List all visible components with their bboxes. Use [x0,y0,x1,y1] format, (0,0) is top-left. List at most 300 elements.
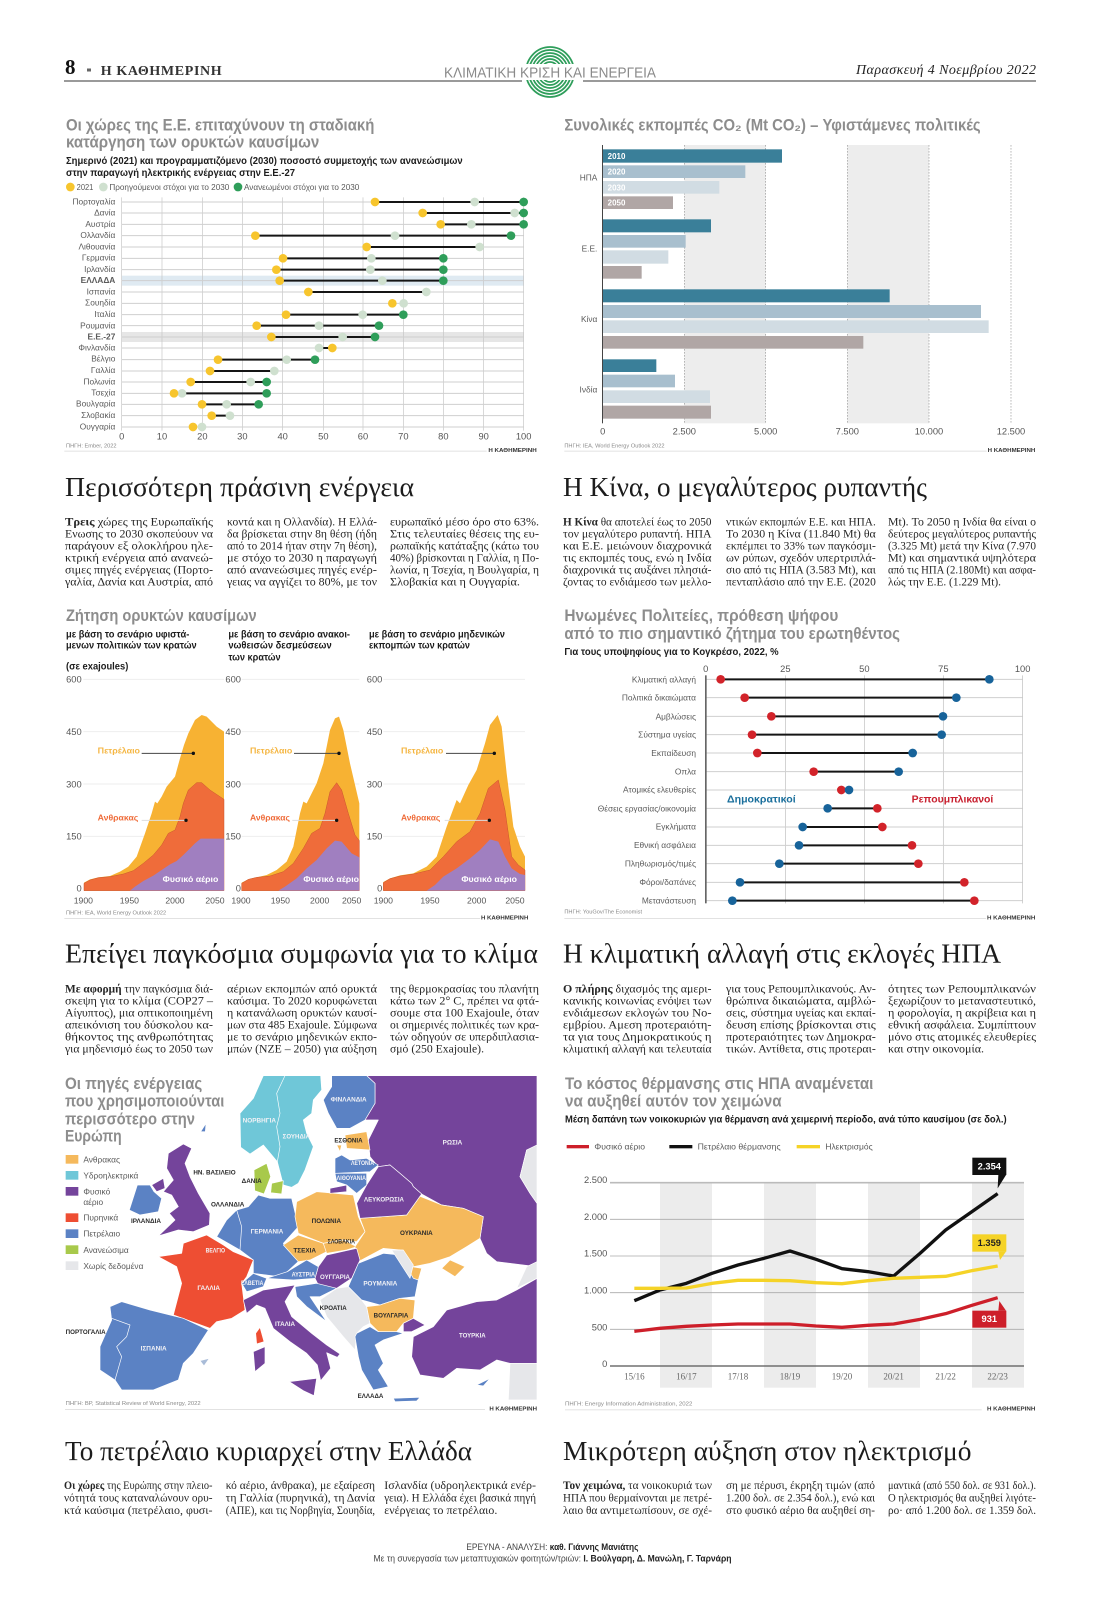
x axis labels: 21/22 [935,1372,956,1382]
Republican dots [716,675,979,905]
country labels: Αυστρία [85,219,116,229]
y axis labels: 150 [367,832,382,842]
text block: US elections: Ο πλήρης διχασμός της αμερι- [563,984,712,996]
text block: China: από τις ΗΠΑ (2.180Mt) και ασφα- [888,564,1036,576]
chart subtitle [66,156,463,179]
map legend: αέριο [83,1197,103,1207]
x axis labels: 7.500 [836,427,859,437]
date: Παρασκευή 4 Νοεμβρίου 2022 [855,63,1036,78]
y axis labels: 500 [592,1322,607,1332]
y axis labels: 300 [225,779,241,789]
map of Europe [100,1076,537,1402]
text block: green energy: κοντά και η Ολλανδία). Η Ελλά- [227,516,377,528]
map legend: Υδροηλεκτρικά [83,1170,139,1180]
x axis labels: 60 [358,432,368,442]
map labels: dark: ΗΝ. ΒΑΣΙΛΕΙΟ [193,1169,236,1176]
x axis labels: 2050 [205,895,225,905]
x axis labels: 2000 [467,895,486,905]
text block: green energy: κτρική ενέργεια από ανανεώ- [65,552,213,564]
page number: 8 [65,55,76,79]
x axis labels: 1950 [420,895,440,905]
heading: climate agreement: Επείγει παγκόσμια συμφωνία για το κλίμα [65,938,538,968]
issue labels: Εθνική ασφάλεια [634,840,696,850]
x axis labels: 0 [119,432,124,442]
y axis labels: 0 [602,1359,607,1369]
chart title [565,1075,873,1111]
text block: green energy: 40%) βρίσκονται η Γαλλία, η Πο- [390,552,539,564]
map title: Οι πηγές ενέργειας [65,1075,202,1093]
text block: green energy: από το 2014 ήταν στην 7η θέση), [227,540,377,552]
y axis labels: 150 [66,832,82,842]
x axis labels: 20/21 [883,1372,904,1382]
chart subtitle: στην παραγωγή ηλεκτρικής ενέργειας στην Ε.Ε.-27 [66,168,295,179]
map labels: light: ΓΕΡΜΑΝΙΑ [251,1228,284,1235]
text block: oil in Greece: Οι χώρες της Ευρώπης στην πλειο- [64,1479,213,1492]
text block: US elections: ξεχωρίζουν το μεταναστευτικό, [888,996,1036,1008]
area chart: stated policies: Ανθρακας [98,812,138,822]
text block: climate agreement: για μηδενισμό έως το 2050 των [64,1044,213,1056]
area chart: announced pledges: Πετρέλαιο [250,745,292,755]
text block: green energy: σιμες πηγές ενέργειας (Πορτο- [65,564,213,576]
x axis labels: 22/23 [987,1372,1008,1382]
text block: electricity: ση με πέρυσι, έκρηξη τιμών (από [726,1480,875,1492]
x axis labels [600,427,1025,437]
issue labels: Εγκλήματα [656,822,696,832]
icon: fingerprint logo [526,47,574,97]
issue labels: Σύστημα υγείας [638,730,696,740]
text block: climate agreement: κάτω των 2° C, πρέπει να φτά- [390,996,539,1008]
background bands [684,145,929,423]
y axis labels: 450 [367,727,382,737]
country labels: Πορτογαλία [72,196,116,206]
scenario subtitles: με βάση το σενάριο μηδενικών [369,629,505,640]
text block: oil in Greece: νότητά τους καταναλώνουν ορυ- [64,1492,213,1504]
map labels: dark: ΒΟΥΛΓΑΡΙΑ [374,1312,408,1319]
credit: Η ΚΑΘΗΜΕΡΙΝΗ [987,915,1035,921]
text block: China: δεύτερος μεγαλύτερος ρυπαντής [888,528,1036,540]
text block: China: τον μεγαλύτερο ρυπαντή. ΗΠΑ [563,528,712,540]
heading: oil in Greece: Το πετρέλαιο κυριαρχεί στην Ελλάδα [65,1435,472,1466]
issue labels: Μετανάστευση [642,895,696,905]
country labels: Σλοβακία [81,410,116,420]
y axis labels: 300 [66,779,82,789]
text block: green energy: Ενωσης το 2030 σκοπεύουν να [65,528,213,540]
map legend: Χωρίς δεδομένα [83,1261,144,1271]
y axis labels: 1.500 [584,1249,607,1259]
text block: green energy: με στόχο το 2030 η παραγωγή [227,552,377,564]
source: ΠΗΓΗ: BP, Statistical Review of World Energy, 2022 [66,1401,201,1407]
chart title: κατάργηση των ορυκτών καυσίμων [66,134,319,152]
x axis labels: 17/18 [728,1372,749,1382]
bars: USA: 2010 [608,152,626,161]
text block: US elections: και στην οικονομία. [888,1044,984,1056]
callout: 931: 931 [982,1314,997,1324]
chart subtitle: Μέση δαπάνη των νοικοκυριών για θέρμανση ανά χειμερινή περίοδο, ανά τύπο καυσίμου (σε δολ.) [565,1115,1007,1126]
area chart: stated policies: Πετρέλαιο [98,745,140,755]
text block: US elections: τικών. Αντίθετα, στις προτεραι- [726,1044,876,1056]
issue labels: Θέσεις εργασίας/οικονομία [598,803,696,813]
area chart: net zero [383,715,525,891]
text block: US elections: σεις, σύστημα υγείας και εκπαί- [726,1008,876,1020]
map labels: dark: ΟΛΛΑΝΔΙΑ [211,1202,245,1209]
chart title: Συνολικές εκπομπές CO₂ (Mt CO₂) – Υφιστάμενες πολιτικές [564,117,981,135]
highlight bands [122,276,524,286]
text block: oil in Greece: κό αέριο, άνθρακα), με εξαίρεση [226,1480,375,1492]
area chart: stated policies: Φυσικό αέριο [163,874,218,884]
text block: US elections: προτεραιότητες των Δημοκρα- [726,1032,876,1044]
text block: US elections: μόνο στις ατομικές ελευθερίες [888,1032,1036,1044]
text block: US elections: κανικής κοινωνίας ενόψει των [563,996,712,1008]
panel: renewables dumbbell chart [64,117,537,454]
y axis labels: 600 [66,675,82,685]
issue labels: Φόροι/δαπάνες [639,877,696,887]
credit: Η ΚΑΘΗΜΕΡΙΝΗ [481,915,528,921]
x axis labels: 10.000 [915,427,943,437]
x axis labels: 19/20 [832,1372,853,1382]
issue labels [598,674,696,905]
x axis labels: 90 [478,432,489,442]
map labels: dark: ΚΡΟΑΤΙΑ [320,1305,347,1312]
text block: green energy: Τρεις χώρες της Ευρωπαϊκής [65,516,213,528]
country labels [580,173,598,395]
text block: China: σιο από τις ΗΠΑ (3.583 Mt), και [726,564,877,576]
range lines [174,202,524,416]
renewed targets dots [254,198,528,409]
text block: climate agreement: απεικόνιση του δύσκολου κα- [65,1020,213,1032]
page header [64,47,1036,97]
x axis labels: 16/17 [676,1372,697,1382]
map legend: Πυρηνικά [83,1213,118,1223]
x axis labels: 2050 [342,895,361,905]
map labels: light: ΡΩΣΙΑ [443,1140,463,1147]
text block: climate agreement: σκεψη για το κλίμα (COP27 – [65,996,213,1008]
bars: USA: 2020 [608,168,626,177]
callout: 2.354: 2.354 [978,1161,1002,1171]
text block: US elections: ενδιάμεσων εκλογών του Νο- [563,1008,712,1020]
y axis labels: 0 [236,884,241,894]
bars: EU [603,219,711,279]
map labels: light: ΛΕΥΚΟΡΩΣΙΑ [364,1197,404,1204]
panel: Europe energy map [65,1075,537,1412]
text block: oil in Greece: κτά καύσιμα (πετρέλαιο, φυσι- [64,1505,213,1517]
text block: US elections: κλιματική αλλαγή και τελευταία [563,1044,712,1056]
x axis labels: 70 [398,432,409,442]
country labels: Ρουμανία [80,320,116,330]
text block: China: λώς την Ε.Ε. (1.229 Mt). [888,576,1001,588]
map labels: light: ΤΟΥΡΚΙΑ [459,1332,486,1339]
chart title: Το κόστος θέρμανσης στις ΗΠΑ αναμένεται [565,1075,873,1093]
x axis labels: 18/19 [780,1372,801,1382]
callout: 2.354 [972,1158,1006,1188]
text block: US elections: δευση επίσης βρίσκονται στις [726,1020,876,1032]
country labels: Σουηδία [85,298,116,308]
map labels: light: ΙΤΑΛΙΑ [275,1321,295,1328]
text block: China: Το 2030 η Κίνα (11.840 Mt) θα [726,528,876,540]
series labels: Ρεπουμπλικανοί [912,794,994,805]
country labels: Τσεχία [91,388,116,398]
text block: green energy: από ανανεώσιμες πηγές ενέρ- [227,564,377,576]
credit: Η ΚΑΘΗΜΕΡΙΝΗ [488,448,537,454]
country labels: Ουγγαρία [80,421,116,431]
x axis labels: 1900 [74,895,93,905]
issue labels: Ατομικές ελευθερίες [623,785,696,795]
x axis labels: 10 [157,432,167,442]
text block: climate agreement: Με αφορμή την παγκόσμια διά- [65,984,213,996]
callout: 1.359 [972,1234,1006,1260]
legend: Πετρέλαιο θέρμανσης [698,1141,781,1151]
text block: electricity: 1.200 δολ. σε 2.354 δολ.), ενώ και [726,1492,876,1504]
y axis labels: 1.000 [584,1286,607,1296]
line: natural gas [634,1298,998,1331]
text block: oil in Greece: γεια). Η Ελλάδα έχει βασικά πηγή [383,1492,536,1504]
text block: US elections: θρώπινα δικαιώματα, αμβλώ- [726,996,876,1008]
x axis labels: 1950 [120,895,139,905]
text block: climate agreement: της θερμοκρασίας του πλανήτη [390,984,539,996]
x axis labels: 12.500 [997,427,1025,437]
text block: China: Mt) και σημαντικά υψηλότερα [888,552,1036,564]
callout: 931 [972,1301,1006,1328]
map labels: dark: ΕΛΛΑΔΑ [358,1393,384,1400]
text block: climate agreement: μπών (ΝΖΕ – 2050) για αύξηση [227,1044,377,1056]
y axis labels: 450 [225,727,241,737]
source: ΠΗΓΗ: YouGov/The Economist [564,910,642,916]
text block: climate agreement: σμό (250 Exajoule). [390,1044,484,1056]
text block: electricity: Ο ηλεκτρισμός θα αυξηθεί λιγότε- [888,1492,1036,1504]
map labels: light: ΙΣΠΑΝΙΑ [141,1346,167,1353]
scenario subtitles: (σε exajoules) [66,661,128,672]
x axis labels: 5.000 [754,427,777,437]
map labels: light: ΑΥΣΤΡΙΑ [292,1272,315,1279]
range lines [721,679,989,901]
x axis labels: 40 [277,432,288,442]
map title [65,1075,224,1146]
text block: electricity: μαντικά (από 550 δολ. σε 931 δολ.). [888,1480,1036,1492]
text block: green energy [64,516,539,588]
y axis labels [66,675,382,894]
bars: China [603,289,989,349]
country labels: Λιθουανία [78,241,116,251]
y axis labels: 300 [367,779,382,789]
series labels [727,794,994,805]
scenario subtitles: με βάση το σενάριο υφιστά- [66,629,189,640]
x axis labels: 100 [1015,664,1030,674]
country labels: Βέλγιο [91,354,116,364]
map labels: light: ΛΙΘΟΥΑΝΙΑ [337,1175,366,1182]
section title: ΚΛΙΜΑΤΙΚΗ ΚΡΙΣΗ ΚΑΙ ΕΝΕΡΓΕΙΑ [444,64,656,82]
y axis labels: 450 [66,727,82,737]
country labels: Βουλγαρία [76,399,116,409]
legend [567,1141,873,1151]
text block: climate agreement: σουμε στα 100 Exajoule, όταν [390,1008,539,1020]
map title: που χρησιμοποιούνται [65,1093,224,1111]
text block: oil in Greece [64,1479,536,1517]
legend [66,182,360,192]
country labels: Κίνα [581,314,598,324]
x axis labels: 1950 [271,895,290,905]
map labels: dark: ΤΣΕΧΙΑ [293,1248,316,1255]
x axis labels: 30 [237,432,248,442]
legend: Προηγούμενοι στόχοι για το 2030 [109,182,230,192]
country labels: Πολωνία [83,376,116,386]
map legend: Φυσικό [83,1186,111,1196]
callout: 1.359: 1.359 [978,1238,1001,1248]
text block: oil in Greece: ενέργειας το πετρέλαιο. [384,1505,497,1517]
map labels: dark: ΕΣΘΟΝΙΑ [334,1138,363,1145]
map legend: Ανθρακας [83,1154,120,1164]
source: ΠΗΓΗ: IEA, World Energy Outlook 2022 [66,910,166,916]
area chart: net zero: Πετρέλαιο [401,745,443,755]
heading: US elections: Η κλιματική αλλαγή στις εκλογές ΗΠΑ [563,938,1001,968]
x axis labels: 2000 [310,895,329,905]
map labels: dark [66,1138,433,1400]
map legend [66,1154,144,1271]
map labels: light: ΟΥΓΓΑΡΙΑ [320,1274,350,1281]
text block: China: τις εκπομπές τους, ενώ η Ινδία [563,552,712,564]
legend: Ανανεωμένοι στόχοι για το 2030 [244,182,360,192]
y axis labels: 600 [367,675,382,685]
Democrat dots [728,675,994,905]
country labels: Φινλανδία [78,342,116,352]
area chart: announced pledges [242,717,359,891]
text block: US elections: τα για τους Δημοκρατικούς η [563,1032,712,1044]
text block: US elections: η φορολογία, η ακρίβεια και η [888,1008,1036,1020]
x axis labels: 75 [938,664,949,674]
text block: electricity: λαιο θα αντιμετωπίσουν, σε σχέ- [563,1505,712,1517]
credit: Η ΚΑΘΗΜΕΡΙΝΗ [489,1406,537,1412]
y axis labels: 0 [76,884,82,894]
area chart: net zero: Φυσικό αέριο [461,874,517,884]
bars: USA: 2050 [608,199,626,208]
scenario subtitles: εκπομπών των κρατών [369,641,470,652]
x axis labels: 25 [780,664,791,674]
country labels: Ινδία [580,385,598,395]
y axis labels: 2.000 [584,1212,607,1222]
x axis labels: 50 [859,664,870,674]
chart title: Οι χώρες της Ε.Ε. επιταχύνουν τη σταδιακή [66,117,374,135]
country labels: ΕΛΛΑΔΑ [81,275,115,285]
map labels: light: ΕΛΒΕΤΙΑ [241,1280,263,1287]
text block: electricity: Τον χειμώνα, τα νοικοκυριά των [563,1479,712,1492]
scenario subtitles: των κρατών [228,652,281,663]
text block: climate agreement: Αίγυπτος), μια οπτικοποιημένη [65,1008,213,1020]
map legend: Πετρέλαιο [83,1229,121,1239]
x axis labels [624,1372,1008,1382]
country labels: Ολλανδία [80,230,116,240]
bars: USA [603,149,782,209]
text block: climate agreement: θήκοντος της ανθρωπότητας [65,1032,214,1044]
text block: climate agreement: τών οδηγούν σε υπερδιπλασια- [390,1032,539,1044]
x axis labels: 2000 [165,895,185,905]
issue labels: Πληθωρισμός/τιμές [625,858,696,868]
text block: green energy: ρωπαϊκής κατάταξης (κάτω του [390,540,539,552]
text block: China: Mt). Το 2050 η Ινδία θα είναι ο [888,516,1036,528]
text block: China: πενταπλάσιο από την Ε.Ε. (2020 [726,576,876,588]
text block: electricity: ΗΠΑ που θερμαίνονται με πετρέ- [563,1492,712,1504]
text block: climate agreement: οι σημερινές πολιτικές των κρα- [390,1020,539,1032]
issue labels: Κλιματική αλλαγή [632,674,696,684]
map labels: dark: ΠΟΡΤΟΓΑΛΙΑ [66,1329,106,1336]
area chart: net zero: Ανθρακας [401,812,440,822]
scenario subtitles: με βάση το σενάριο ανακοι- [228,629,350,640]
x axis labels: 1900 [374,895,393,905]
area chart: announced pledges: Φυσικό αέριο [303,874,359,884]
text block: China: ντικών εκπομπών Ε.Ε. και ΗΠΑ. [726,516,876,528]
text block: green energy: Στις τελευταίες θέσεις της ευ- [390,528,539,540]
newspaper name: Η ΚΑΘΗΜΕΡΙΝΗ [101,64,222,79]
country labels: Ιταλία [94,309,116,319]
map labels: light: ΛΕΤΟΝΙΑ [351,1160,374,1167]
area chart: stated policies [84,715,224,891]
credits [374,1542,732,1564]
x axis labels: 20 [197,432,208,442]
y axis labels: 600 [225,675,241,685]
chart title [564,607,900,643]
panel: heating cost line chart [565,1075,1035,1413]
text block: electricity: ρο· από 1.200 δολ. σε 1.359 δολ. [888,1505,1036,1517]
x axis labels [74,895,525,905]
source: ΠΗΓΗ: IEA, World Energy Outlook 2022 [564,443,664,449]
text block: China [563,516,1036,588]
x axis labels: 0 [703,664,708,674]
country labels: Ε.Ε.-27 [88,331,116,341]
issue labels: Αμβλώσεις [656,711,696,721]
text block: US elections [563,984,1036,1056]
text block: US elections: για τους Ρεπουμπλικανούς. Αν- [725,984,876,996]
x axis labels [119,432,531,442]
map labels: dark: ΠΟΛΩΝΙΑ [312,1218,341,1225]
legend: 2021 [77,182,94,192]
credits: ΕΡΕΥΝΑ - ΑΝΑΛΥΣΗ: καθ. Γιάννης Μανιάτης [466,1542,638,1553]
y axis labels: 0 [377,884,382,894]
map labels: dark: ΟΥΚΡΑΝΙΑ [400,1230,433,1237]
area chart: announced pledges: Ανθρακας [250,812,290,822]
chart subtitle: Σημερινό (2021) και προγραμματιζόμενο (2030) ποσοστό συμμετοχής των ανανεώσιμων [66,156,463,167]
series labels: Δημοκρατικοί [727,794,796,805]
text block: climate agreement [64,984,539,1056]
chart title: Ηνωμένες Πολιτείες, πρόθεση ψήφου [564,607,838,625]
text block: China: (3.325 Mt) μετά την Κίνα (7.970 [888,540,1036,552]
text block: US elections: εμβρίου. Αμεση προτεραιότη- [563,1020,712,1032]
map labels: light [141,1097,486,1353]
text block: US elections: εθνική ασφάλεια. Συμπίπτουν [888,1020,1036,1032]
y axis labels [584,1175,607,1369]
text block: China: εκπέμπει το 33% των παγκόσμι- [726,540,876,552]
text block: green energy: παράγουν εξ ολοκλήρου ηλε- [65,540,213,552]
map labels: light: ΡΟΥΜΑΝΙΑ [363,1281,398,1288]
scenario subtitles: μενων πολιτικών των κρατών [66,641,197,652]
text block: climate agreement: αέριων εκπομπών από ορυκτά [227,984,377,996]
text block: green energy: δα βρίσκεται στην 8η θέση (ήδη [227,528,377,540]
bars: USA: 2030 [608,183,626,192]
x axis labels [703,664,1030,674]
text block: oil in Greece: (ΑΠΕ), και τις Νορβηγία, Σουηδία, [226,1505,375,1517]
text block: China: Η Κίνα θα αποτελεί έως το 2050 [563,516,712,528]
bars: India [603,359,711,419]
text block: green energy: Σλοβακία και η Ουγγαρία. [390,576,520,588]
map title: περισσότερο στην [65,1110,195,1128]
country labels: Γαλλία [91,365,116,375]
x axis labels: 0 [600,427,605,437]
text block: China: ων ρύπων, σχεδόν υπερτριπλά- [726,552,876,564]
country labels: Ε.Ε. [582,244,597,254]
source: ΠΗΓΗ: Ember, 2022 [66,443,117,449]
credit: Η ΚΑΘΗΜΕΡΙΝΗ [987,1407,1035,1413]
text block: climate agreement: καύσιμα. Το 2020 κορυφώνεται [227,996,378,1008]
scenario subtitles [66,629,505,672]
text block: climate agreement: η κατανάλωση ορυκτών καυσί- [227,1008,377,1020]
map labels: light: ΒΕΛΓΙΟ [206,1247,225,1254]
map legend: Ανανεώσιμα [83,1245,129,1255]
